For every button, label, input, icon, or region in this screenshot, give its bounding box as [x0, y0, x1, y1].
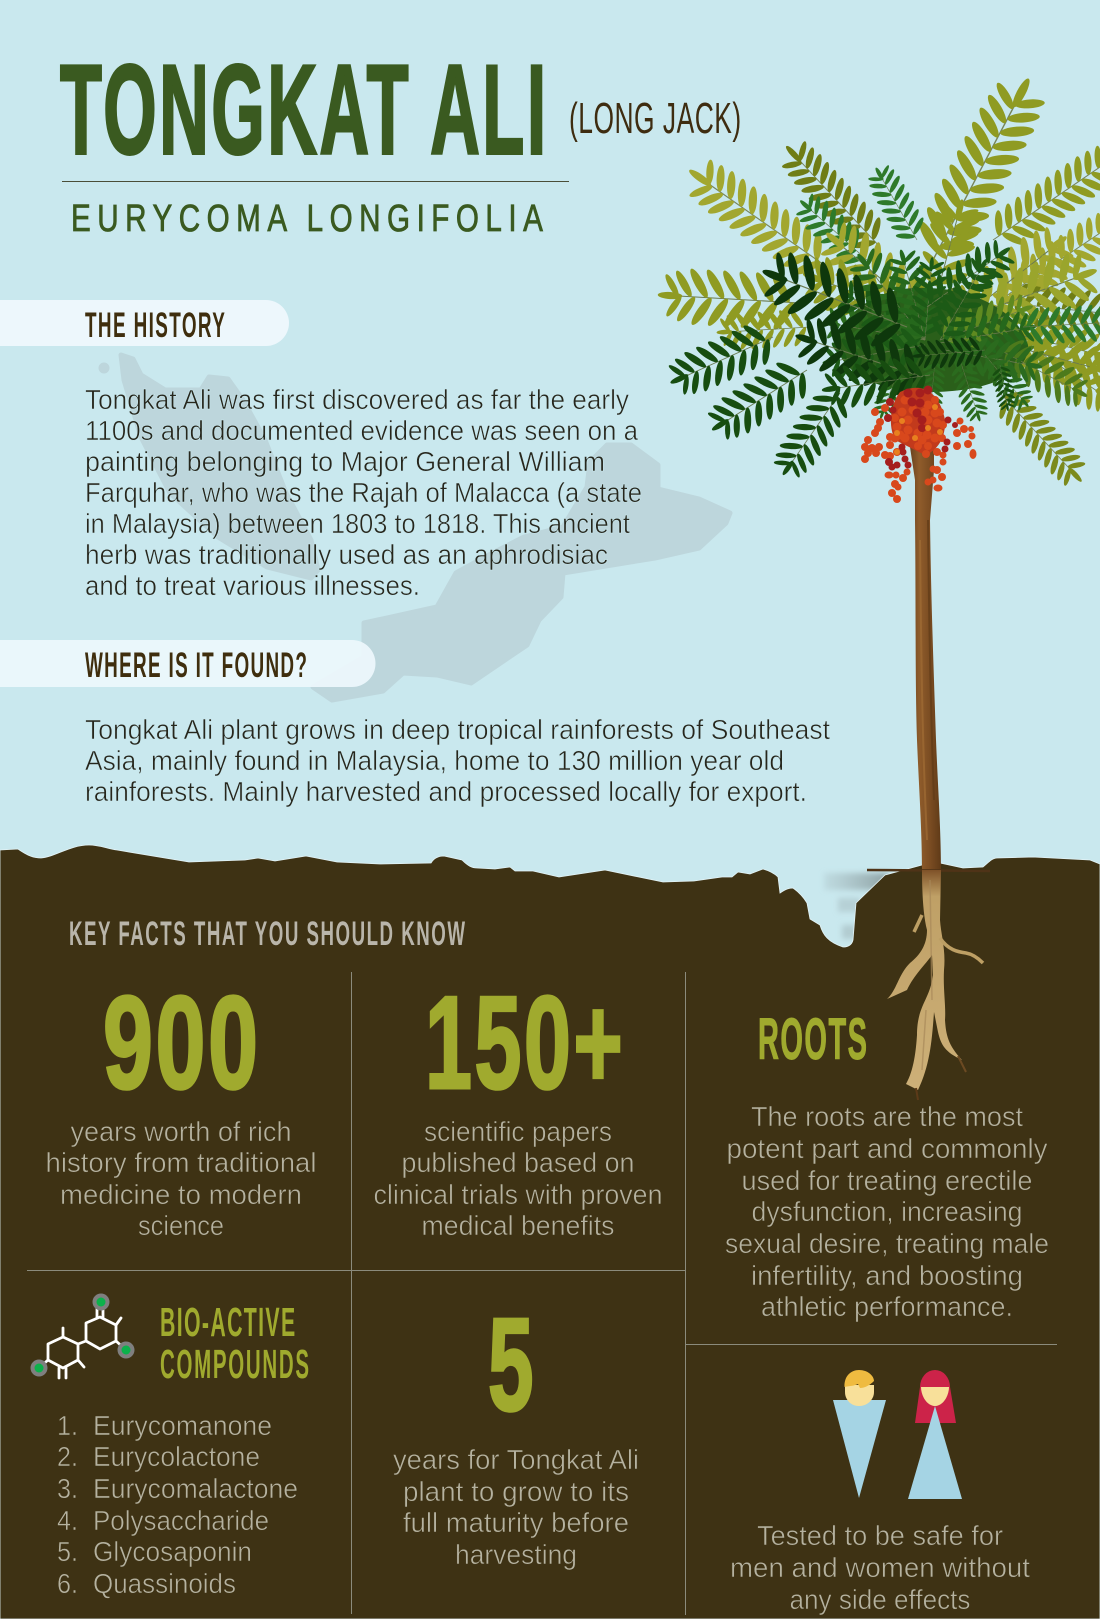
stat: 5: 5 — [488, 1292, 534, 1439]
stat text: 5: plant to grow to its — [403, 1476, 629, 1507]
compounds list: 2. — [57, 1441, 78, 1472]
heading: bio-active compounds: COMPOUNDS — [160, 1341, 309, 1387]
stat text: 900: medicine to modern — [60, 1179, 302, 1210]
ground line at trunk — [867, 870, 990, 871]
foliage core — [835, 288, 1028, 392]
text block: safety: any side effects — [790, 1584, 970, 1615]
stat text: 900: history from traditional — [46, 1147, 316, 1178]
compounds list: 3. — [57, 1473, 78, 1504]
stat text: 5: full maturity before — [403, 1507, 629, 1538]
text block: history: herb was traditionally used as an aphrodisiac — [85, 539, 608, 570]
roots text — [725, 1101, 1049, 1322]
man — [833, 1370, 886, 1498]
stat text: 150+: scientific papers — [424, 1116, 612, 1147]
text block: safety — [730, 1520, 1030, 1615]
olive back fronds — [656, 64, 1100, 494]
icon: molecule — [30, 1294, 134, 1378]
stat text: 150+: published based on — [402, 1147, 634, 1178]
text block: where found: Tongkat Ali plant grows in deep tropical rainforests of Southeast — [85, 714, 830, 745]
text block: history: in Malaysia) between 1803 to 1818. This ancient — [85, 508, 630, 539]
scientific name: EURYCOMA LONGIFOLIA — [71, 198, 543, 240]
stat text: 5: years for Tongkat Ali — [393, 1444, 639, 1475]
compounds list: 6. — [57, 1568, 78, 1599]
compounds list: Polysaccharide — [93, 1505, 269, 1536]
stat text: 900 — [46, 1116, 316, 1241]
text block: where found — [85, 714, 830, 807]
roots text: used for treating erectile — [742, 1165, 1032, 1196]
stat: 900 — [46, 969, 316, 1241]
stat text: 150+ — [374, 1116, 662, 1241]
compounds list: 4. — [57, 1505, 78, 1536]
roots text: potent part and commonly — [726, 1133, 1048, 1164]
map of Malaysia watermark — [101, 355, 730, 700]
pill: the history — [0, 300, 289, 346]
pill: the history: THE HISTORY — [85, 306, 225, 344]
text block: where found: Asia, mainly found in Malaysia, home to 130 million year old — [85, 745, 784, 776]
compounds list: Eurycomalactone — [93, 1473, 298, 1504]
dark fronds — [661, 240, 1018, 487]
stat: 150+: 150+ — [425, 970, 623, 1117]
roots — [887, 870, 983, 1100]
text block: history: Farquhar, who was the Rajah of Malacca (a state — [85, 477, 642, 508]
panel: roots: ROOTS — [758, 1006, 867, 1072]
text block: history: painting belonging to Major General William — [85, 446, 605, 477]
compounds list: Eurycolactone — [93, 1441, 260, 1472]
icon: man and woman — [833, 1370, 962, 1499]
title: TONGKAT ALI — [60, 39, 546, 181]
fruit cluster — [861, 386, 976, 503]
compounds list: 1. — [57, 1410, 78, 1441]
stat text: 5 — [393, 1444, 639, 1570]
smudge beside the trunk — [824, 873, 888, 939]
pill: where is it found — [0, 640, 375, 687]
ground silhouette — [0, 845, 1100, 1619]
text block: history: 1100s and documented evidence was seen on a — [85, 415, 639, 446]
stat: 5 — [393, 1292, 639, 1570]
text block: safety: Tested to be safe for — [757, 1520, 1003, 1551]
text block: safety: men and women without — [730, 1552, 1030, 1583]
text block: history: and to treat various illnesses. — [85, 570, 420, 601]
stat text: 900: science — [138, 1210, 224, 1241]
woman — [908, 1370, 962, 1499]
grid lines — [27, 972, 1057, 1615]
trunk — [905, 405, 941, 872]
stat text: 150+: medical benefits — [422, 1210, 614, 1241]
compounds list: Eurycomanone — [93, 1410, 272, 1441]
roots text: sexual desire, treating male — [725, 1228, 1049, 1259]
foliage — [656, 64, 1100, 494]
text block: history: Tongkat Ali was first discovered as far the early — [85, 384, 629, 415]
panel: roots — [725, 1006, 1049, 1322]
heading: bio-active compounds — [160, 1298, 309, 1387]
key facts heading: KEY FACTS THAT YOU SHOULD KNOW — [69, 914, 465, 952]
title divider — [62, 181, 569, 182]
pill: where is it found: WHERE IS IT FOUND? — [85, 646, 307, 684]
stat text: 5: harvesting — [455, 1539, 577, 1570]
roots text: The roots are the most — [751, 1101, 1023, 1132]
icon: tree — [656, 64, 1100, 1100]
stat: 150+ — [374, 970, 662, 1241]
stat text: 900: years worth of rich — [70, 1116, 292, 1147]
stat text: 150+: clinical trials with proven — [374, 1179, 662, 1210]
heading: bio-active compounds: BIO-ACTIVE — [160, 1298, 295, 1345]
roots text: athletic performance. — [761, 1291, 1013, 1322]
roots text: infertility, and boosting — [751, 1260, 1023, 1291]
compounds list: Glycosaponin — [93, 1536, 252, 1567]
roots text: dysfunction, increasing — [752, 1196, 1022, 1227]
green fronds — [819, 230, 1100, 426]
compounds list: Quassinoids — [93, 1568, 236, 1599]
subtitle: long jack: (LONG JACK) — [569, 93, 741, 143]
text block: history — [85, 384, 642, 601]
stat: 900: 900 — [103, 969, 258, 1116]
compounds list: 5. — [57, 1536, 78, 1567]
text block: where found: rainforests. Mainly harvested and processed locally for export. — [85, 776, 807, 807]
compounds list — [57, 1410, 298, 1599]
